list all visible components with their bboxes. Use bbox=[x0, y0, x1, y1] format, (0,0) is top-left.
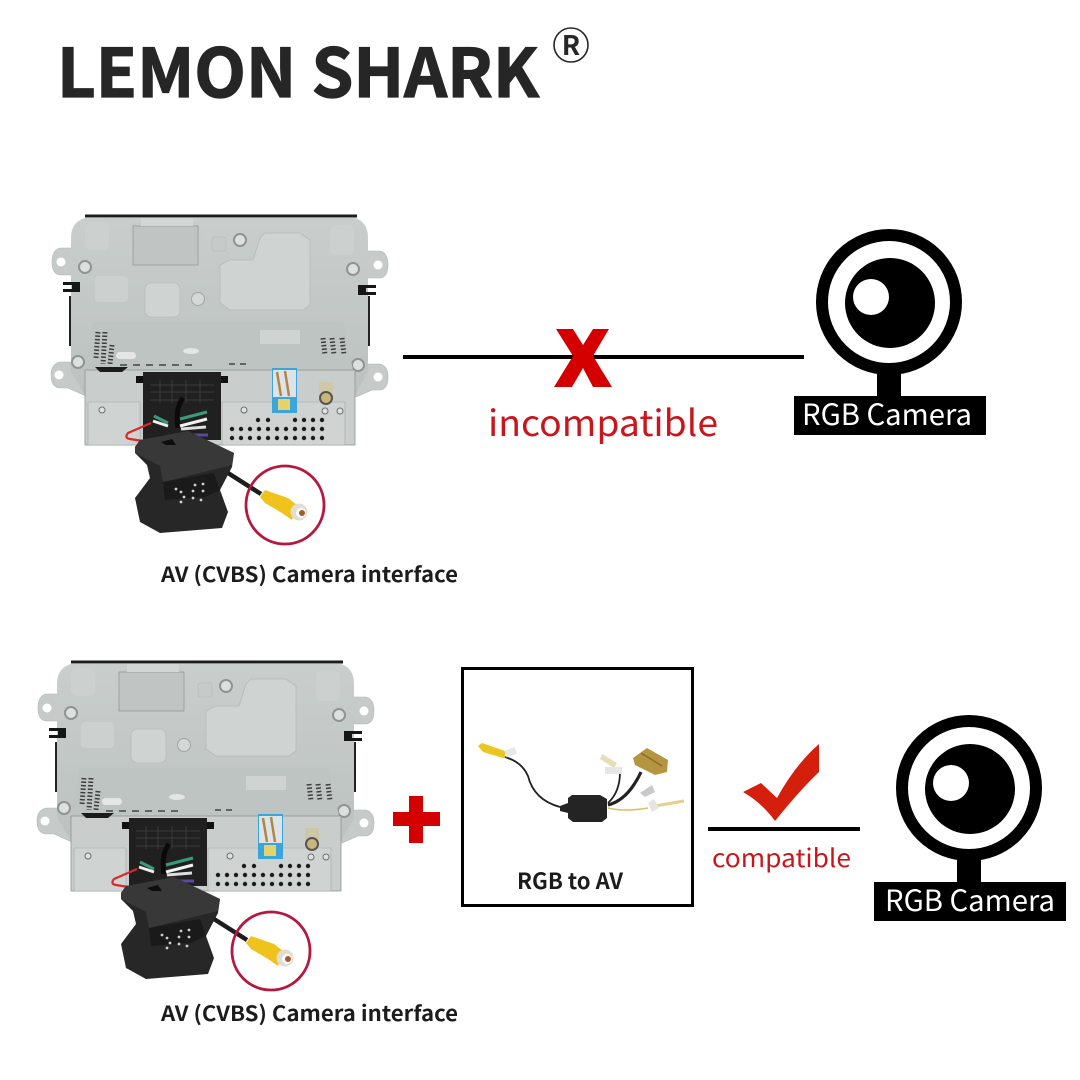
connection line with X mark bbox=[403, 329, 804, 387]
head unit with AV plug: bottom bbox=[37, 662, 374, 990]
label: RGB to AV: RGB to AV bbox=[517, 864, 623, 896]
icon: red check mark bbox=[743, 744, 819, 821]
registered mark: R bbox=[562, 24, 580, 63]
icon: plus bbox=[393, 796, 440, 843]
icon: red X bbox=[554, 329, 612, 387]
panel: RGB to AV adapter bbox=[462, 668, 692, 906]
icon: RGB camera top: RGB Camera bbox=[802, 392, 972, 434]
caption: AV camera interface bottom: AV (CVBS) Camera interface bbox=[160, 998, 458, 1028]
icon: RGB camera top bbox=[794, 235, 986, 435]
caption: AV camera interface top: AV (CVBS) Camera interface bbox=[160, 559, 458, 589]
label: compatible: compatible bbox=[712, 839, 851, 875]
registered mark bbox=[554, 24, 588, 63]
adapter cable bbox=[478, 743, 684, 822]
label: incompatible: incompatible bbox=[488, 395, 718, 447]
title: LEMON SHARK bbox=[57, 20, 540, 117]
icon: RGB camera bottom: RGB Camera bbox=[885, 878, 1055, 920]
connection line bbox=[708, 827, 860, 831]
icon: RGB camera bottom bbox=[874, 721, 1066, 921]
head unit with AV plug: top bbox=[51, 216, 388, 544]
